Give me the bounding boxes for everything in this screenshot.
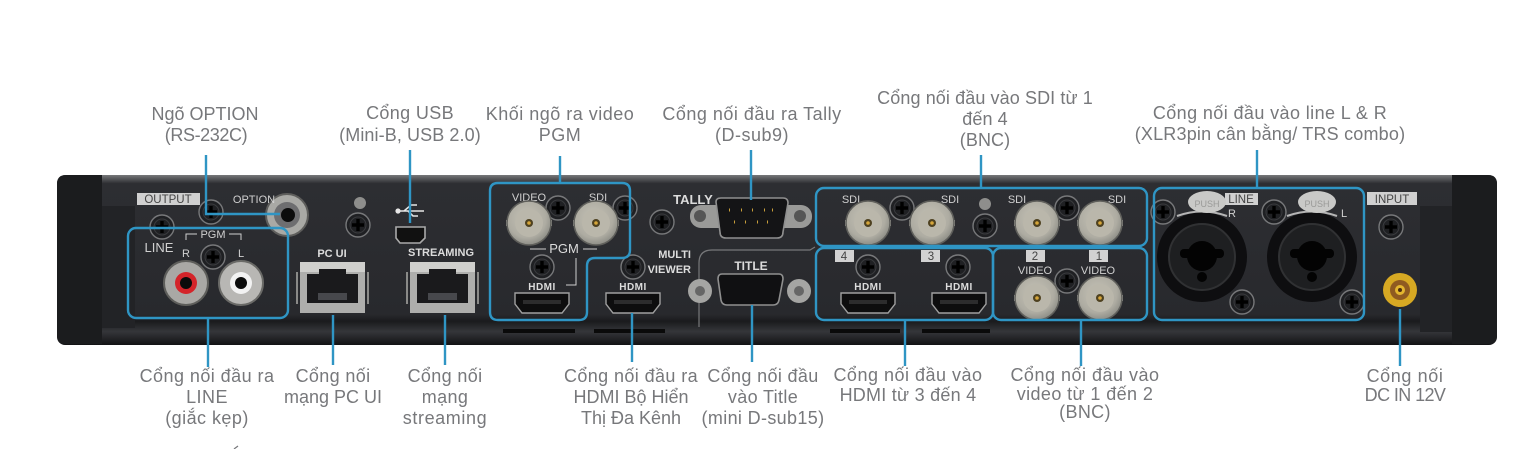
label: line out: LINE [186, 387, 228, 407]
label: streaming: Cổng nối [408, 366, 482, 386]
label: title: Cổng nối đầu [707, 366, 819, 386]
label: title: vào Title [728, 387, 798, 407]
option jack [266, 194, 308, 236]
OUTPUT tag [137, 193, 200, 206]
multiviewer output [606, 249, 691, 313]
callout boxes and leaders [128, 150, 1400, 367]
front feet strip [503, 329, 990, 333]
box: SDI inputs [816, 188, 1147, 246]
SDI inputs: SDI [941, 194, 959, 206]
HDMI inputs: HDMI [854, 282, 882, 293]
mid screw [650, 210, 674, 234]
left end cap [57, 175, 102, 344]
label: streaming: mạng [422, 387, 468, 407]
leader: XLR [1256, 150, 1258, 188]
small stray mark [234, 446, 238, 449]
label: DC in: Cổng nối [1367, 366, 1443, 386]
line labels: R [182, 248, 190, 260]
SDI inputs: SDI [842, 194, 860, 206]
label: USB: (Mini-B, USB 2.0) [339, 125, 481, 145]
USB icon and port [395, 205, 425, 243]
option label: OPTION [233, 194, 275, 206]
box: PGM [490, 183, 630, 320]
HDMI inputs [835, 250, 986, 313]
label: SDI: (BNC) [960, 130, 1010, 150]
PC UI port [297, 248, 368, 313]
line labels: L [238, 248, 244, 260]
RCA red [164, 261, 208, 305]
leader: DC [1399, 309, 1401, 366]
label: multiviewer: Thị Đa Kênh [581, 408, 681, 428]
label: tally: Cổng nối đầu ra Tally [662, 104, 842, 124]
video inputs [1014, 250, 1123, 320]
label: SDI: đến 4 [962, 109, 1008, 129]
INPUT tag [1367, 192, 1417, 206]
multiviewer output: VIEWER [648, 264, 691, 276]
leader: line out [207, 318, 209, 367]
box: line out [128, 228, 288, 318]
leader: streaming [444, 315, 446, 365]
left side recess [102, 206, 135, 328]
label: video in: Cổng nối đầu vào [1010, 365, 1160, 385]
label: tally: (D-sub9) [715, 125, 789, 145]
box: HDMI inputs [816, 248, 993, 320]
LED and screw [346, 197, 370, 237]
RCA white [219, 261, 263, 305]
SDI inputs [842, 194, 1126, 245]
SDI inputs: SDI [1108, 194, 1126, 206]
leader: title [751, 305, 753, 362]
multiviewer output: HDMI [619, 282, 647, 293]
HDMI inputs: 3 [928, 251, 934, 263]
DC input [1383, 273, 1417, 307]
streaming port [407, 247, 478, 313]
HDMI inputs: HDMI [945, 282, 973, 293]
leader: HDMI in [904, 320, 906, 366]
screw [1379, 215, 1403, 239]
INPUT tag: INPUT [1375, 194, 1409, 206]
XLR combo inputs: R [1228, 208, 1236, 220]
device rear panel [57, 175, 1497, 345]
line labels [145, 229, 244, 260]
label: multiviewer: HDMI Bộ Hiển [573, 387, 689, 407]
label: PGM: PGM [539, 125, 581, 145]
label: HDMI in: Cổng nối đầu vào [833, 365, 983, 385]
label: USB: Cổng USB [366, 103, 454, 123]
screw [199, 200, 223, 224]
title connector [688, 259, 811, 305]
label: option: (RS-232C) [165, 125, 247, 145]
label: HDMI in: HDMI từ 3 đến 4 [840, 385, 976, 405]
multiviewer output: MULTI [658, 249, 691, 261]
XLR combo inputs [1151, 191, 1364, 314]
PGM connectors: VIDEO [512, 192, 547, 204]
box: XLR inputs [1154, 188, 1364, 320]
video inputs: VIDEO [1081, 265, 1116, 277]
title section outline [699, 247, 815, 327]
leader: option [206, 155, 280, 214]
PGM connectors: SDI [589, 192, 607, 204]
right end cap [1452, 175, 1497, 344]
label: DC in: DC IN 12V [1365, 385, 1446, 405]
label: PGM: Khối ngõ ra video [486, 104, 634, 124]
XLR combo inputs: LINE [1228, 194, 1254, 206]
leader: PC UI [332, 315, 334, 365]
PGM connectors: HDMI [528, 282, 556, 293]
line labels: LINE [145, 240, 174, 255]
leader: tally [750, 150, 752, 200]
label: streaming: streaming [403, 408, 487, 428]
leader: video in [1080, 320, 1082, 366]
PGM connectors [506, 192, 637, 313]
label: line out: (giắc kẹp) [165, 407, 249, 428]
label: option: Ngõ OPTION [151, 104, 259, 124]
leader: multiviewer [631, 313, 633, 362]
tally connector [673, 192, 812, 238]
video inputs: 1 [1096, 251, 1102, 263]
video inputs: 2 [1032, 251, 1038, 263]
screw [201, 245, 225, 269]
label: SDI: Cổng nối đầu vào SDI từ 1 [877, 88, 1093, 108]
label: video in: (BNC) [1059, 402, 1111, 422]
line labels: PGM [200, 229, 226, 241]
label: XLR: Cổng nối đầu vào line L & R [1153, 103, 1387, 123]
label: PC UI: mạng PC UI [284, 387, 382, 407]
OUTPUT tag: OUTPUT [144, 194, 192, 206]
box: video inputs [993, 248, 1147, 320]
right side recess [1420, 206, 1452, 332]
screw [150, 215, 174, 239]
leader: PGM [559, 156, 561, 183]
title connector: TITLE [734, 259, 768, 273]
tally connector: TALLY [673, 192, 713, 207]
leader: USB [409, 150, 411, 223]
XLR combo inputs: L [1341, 208, 1347, 220]
label: video in: video từ 1 đến 2 [1017, 384, 1153, 404]
PGM connectors: PGM [549, 241, 579, 256]
label: multiviewer: Cổng nối đầu ra [564, 366, 698, 386]
streaming port: STREAMING [408, 247, 474, 259]
PC UI port: PC UI [317, 248, 347, 260]
video inputs: VIDEO [1018, 265, 1053, 277]
label: XLR: (XLR3pin cân bằng/ TRS combo) [1135, 123, 1405, 144]
HDMI inputs: 4 [841, 251, 848, 263]
SDI inputs: SDI [1008, 194, 1026, 206]
label: title: (mini D-sub15) [702, 408, 824, 428]
label: PC UI: Cổng nối [296, 366, 370, 386]
leader: SDI [980, 155, 982, 188]
label: line out: Cổng nối đầu ra [140, 366, 274, 386]
